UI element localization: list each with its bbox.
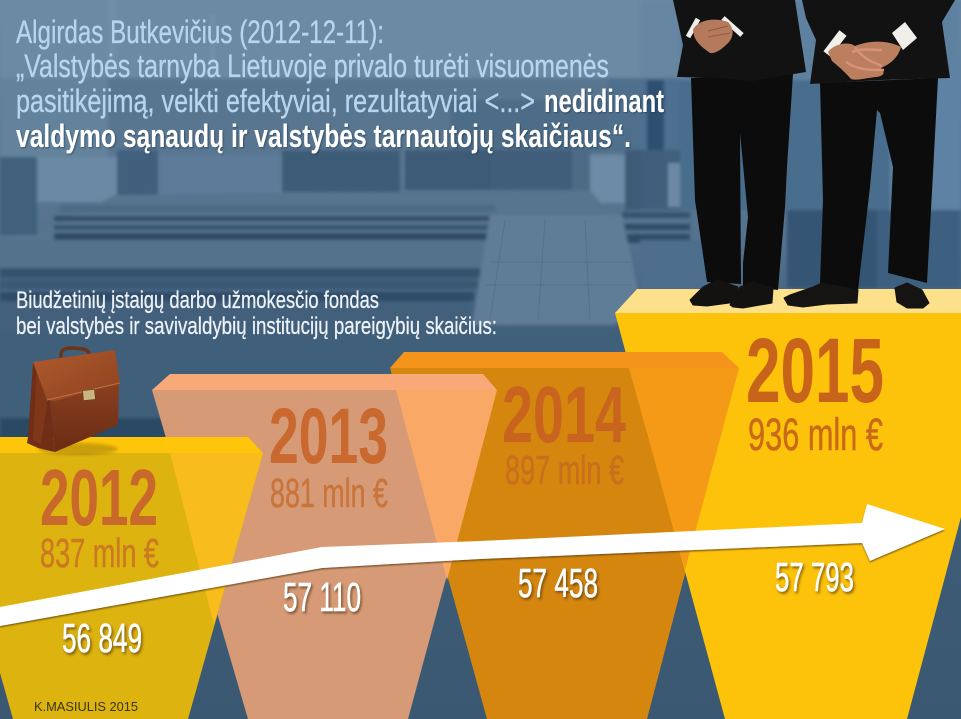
shoes of right man [784, 283, 929, 308]
2012 bar top face [0, 437, 263, 453]
2013 bar top face [152, 374, 497, 390]
employee counts [62, 554, 854, 661]
icon: briefcase [27, 348, 120, 455]
label: 2012 [40, 453, 159, 576]
title quote: valdymo sąnaudų ir valstybės tarnautojų skaičiaus“. [16, 118, 631, 154]
overlap of 2014 and 2015 bars [629, 368, 739, 570]
panel: 2014 bar [390, 368, 739, 719]
overlap of 2012 and 2013 bars [170, 453, 263, 625]
employee counts: 56 849 [62, 615, 142, 661]
label: 2014: 897 mln € [505, 447, 624, 493]
arrow: employee count trend [0, 504, 945, 626]
panel: 2013 bar [152, 390, 497, 719]
title quote: „Valstybės tarnyba Lietuvoje privalo turėti visuomenės [16, 48, 609, 84]
label: 2013: 2013 [269, 391, 388, 480]
employee counts: 57 793 [775, 554, 854, 600]
employee counts: 57 458 [518, 560, 598, 606]
title quote: nedidinant [544, 83, 664, 119]
label: 2015: 936 mln € [748, 409, 883, 460]
label: 2013: 881 mln € [270, 470, 388, 516]
title quote [16, 14, 664, 154]
label: 2013 [269, 391, 388, 516]
title quote: Algirdas Butkevičius (2012-12-11): [16, 14, 384, 50]
subtitle: Biudžetinių įstaigų darbo užmokesčio fondas [16, 287, 379, 314]
overlap of 2013 and 2014 bars [396, 390, 497, 580]
2015 bar top face [615, 289, 961, 313]
man right [784, 0, 955, 308]
credit: K.MASIULIS 2015 [34, 699, 138, 714]
subtitle: bei valstybės ir savivaldybių institucijų pareigybių skaičius: [16, 313, 497, 340]
man left [673, 0, 806, 308]
label: 2014: 2014 [502, 370, 626, 459]
employee counts: 57 110 [283, 574, 361, 620]
shoes of left man [690, 280, 773, 308]
label: 2012: 837 mln € [40, 530, 159, 576]
panel: 2015 bar [615, 289, 961, 719]
subtitle [16, 287, 497, 340]
label: 2014 [502, 370, 626, 493]
2014 bar top face [390, 352, 739, 368]
panel: 2012 bar [0, 437, 263, 719]
label: 2012: 2012 [40, 453, 158, 542]
label: 2015 [746, 320, 884, 460]
title quote: pasitikėjimą, veikti efektyviai, rezultatyviai <...> [16, 83, 535, 119]
label: 2015: 2015 [746, 320, 884, 422]
